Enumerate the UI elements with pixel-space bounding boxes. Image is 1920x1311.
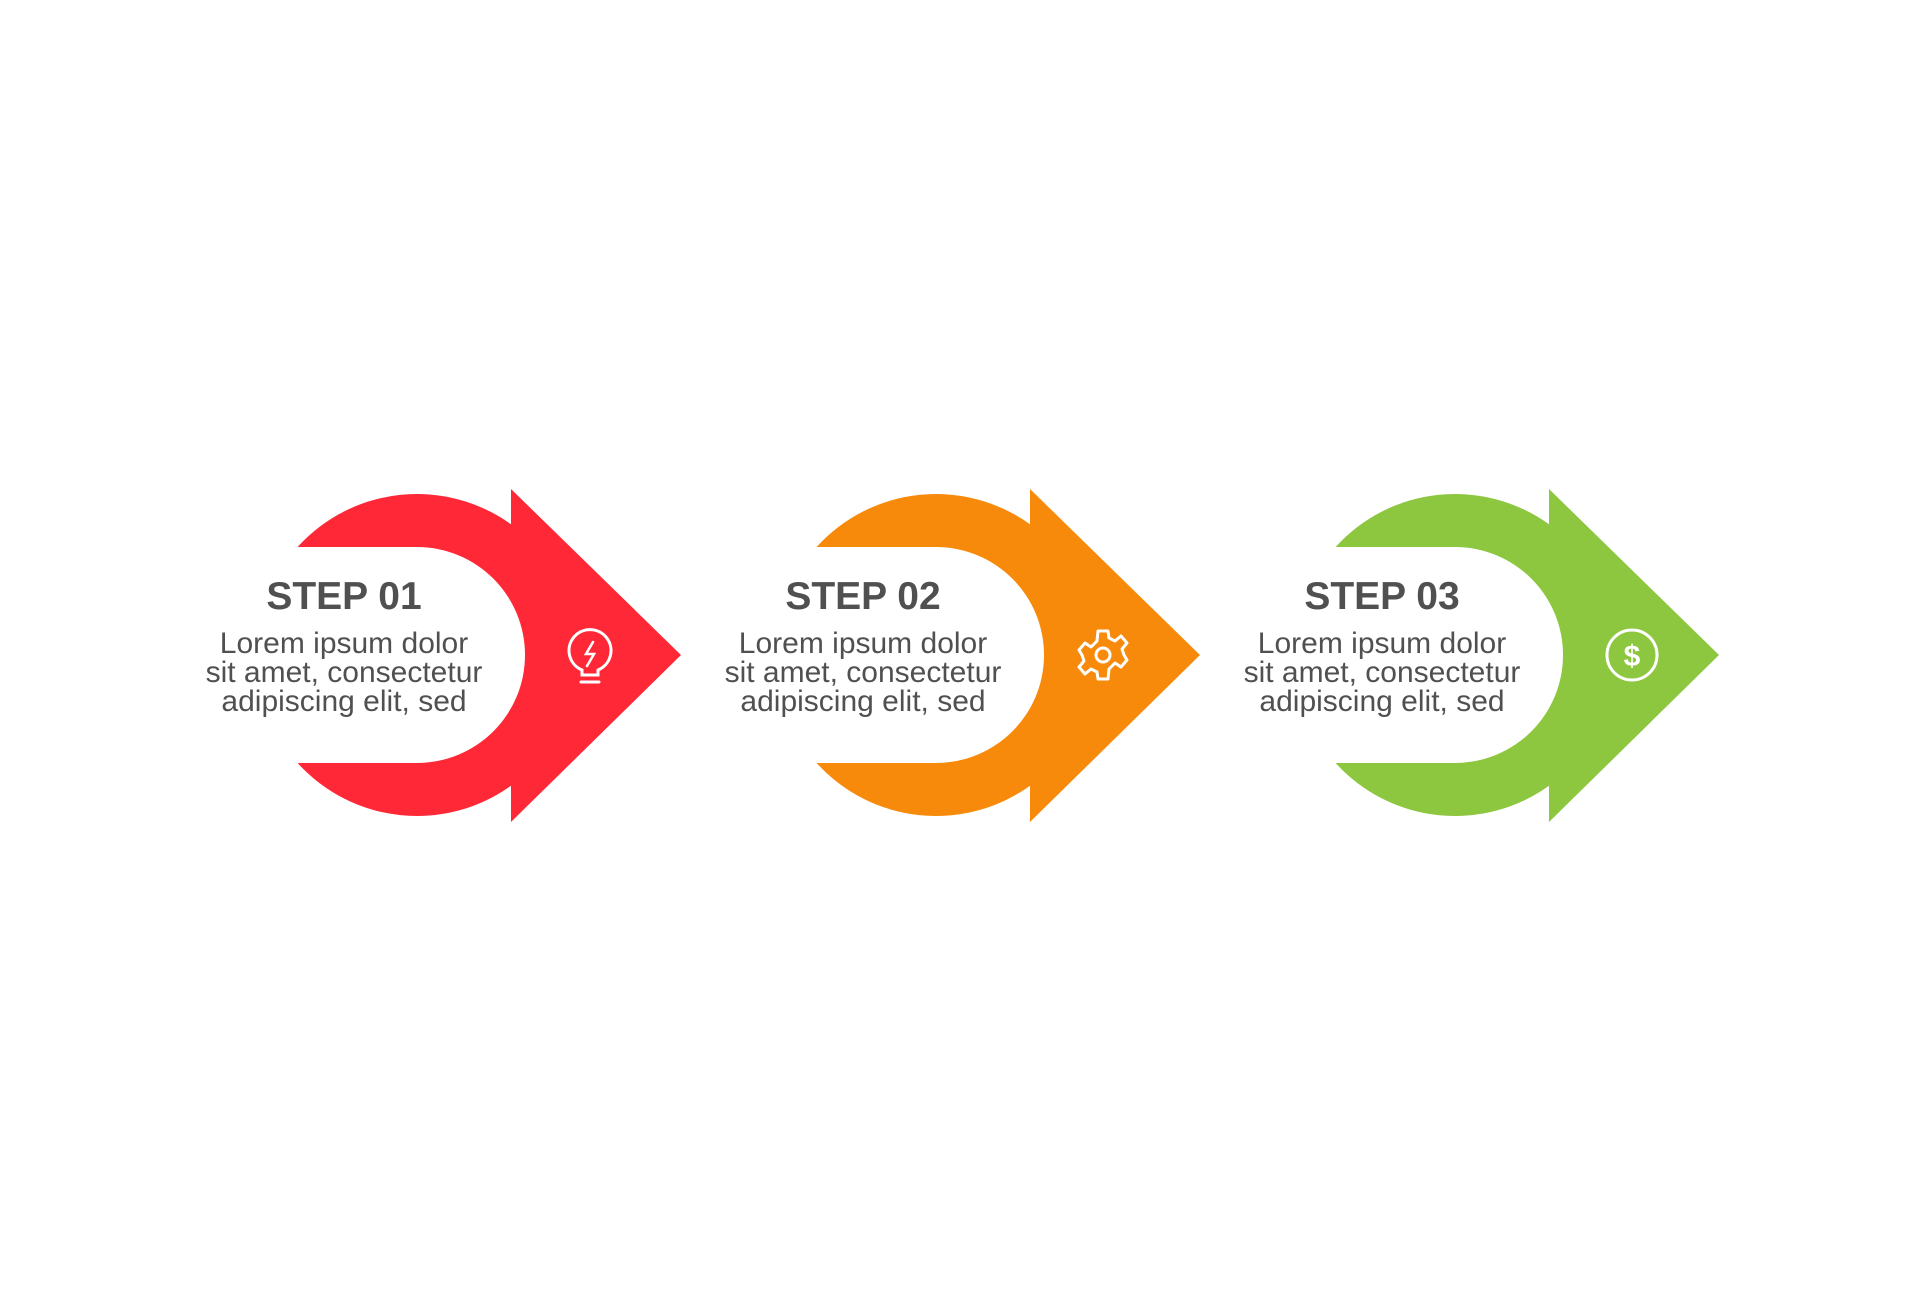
step 3 <box>1244 489 1719 822</box>
heading: step 03: STEP 03 <box>1304 575 1460 618</box>
step 1 <box>206 489 681 822</box>
text block: step 03: sit amet, consectetur <box>1244 656 1520 689</box>
text block: step 02: Lorem ipsum dolor <box>739 627 987 660</box>
text block: step 03: Lorem ipsum dolor <box>1258 627 1506 660</box>
icon: dollar coin: $ <box>1624 640 1641 673</box>
text block: step 01: adipiscing elit, sed <box>221 685 467 718</box>
text block: step 02: adipiscing elit, sed <box>740 685 986 718</box>
icon: light bulb <box>569 630 611 682</box>
text block: step 02: sit amet, consectetur <box>725 656 1001 689</box>
text block: step 01: Lorem ipsum dolor <box>220 627 468 660</box>
arrow shape: green <box>1336 489 1719 822</box>
arrow shape: red <box>298 489 681 822</box>
heading: step 01: STEP 01 <box>266 575 422 618</box>
arrow shape: orange <box>817 489 1200 822</box>
text block: step 03: adipiscing elit, sed <box>1259 685 1505 718</box>
heading: step 02: STEP 02 <box>785 575 941 618</box>
icon: gear <box>1079 631 1127 679</box>
text block: step 01: sit amet, consectetur <box>206 656 482 689</box>
icon: dollar coin <box>1607 630 1657 680</box>
step 2 <box>725 489 1200 822</box>
